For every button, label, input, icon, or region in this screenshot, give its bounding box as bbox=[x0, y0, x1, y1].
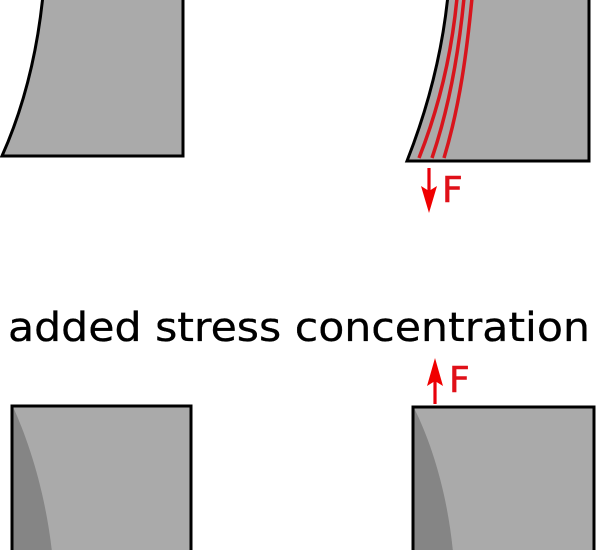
panel: bottom-left block with shaded stress zone bbox=[12, 406, 191, 550]
arrow: downward force bbox=[421, 168, 437, 213]
panel: top-right block with stress lines and force bbox=[407, 0, 589, 213]
arrow: upward force bbox=[427, 358, 443, 404]
label: force F: F bbox=[449, 360, 470, 401]
shaded stress zone bbox=[414, 409, 453, 550]
panel: bottom-right block with shaded stress zone and force bbox=[413, 358, 594, 550]
title: added stress concentration bbox=[8, 305, 590, 351]
shaded stress zone bbox=[14, 408, 52, 550]
panel: top-left block without stress lines bbox=[2, 0, 183, 156]
block shape bbox=[407, 0, 589, 161]
red stress lines bbox=[419, 0, 472, 158]
label: force F: F bbox=[442, 170, 463, 211]
